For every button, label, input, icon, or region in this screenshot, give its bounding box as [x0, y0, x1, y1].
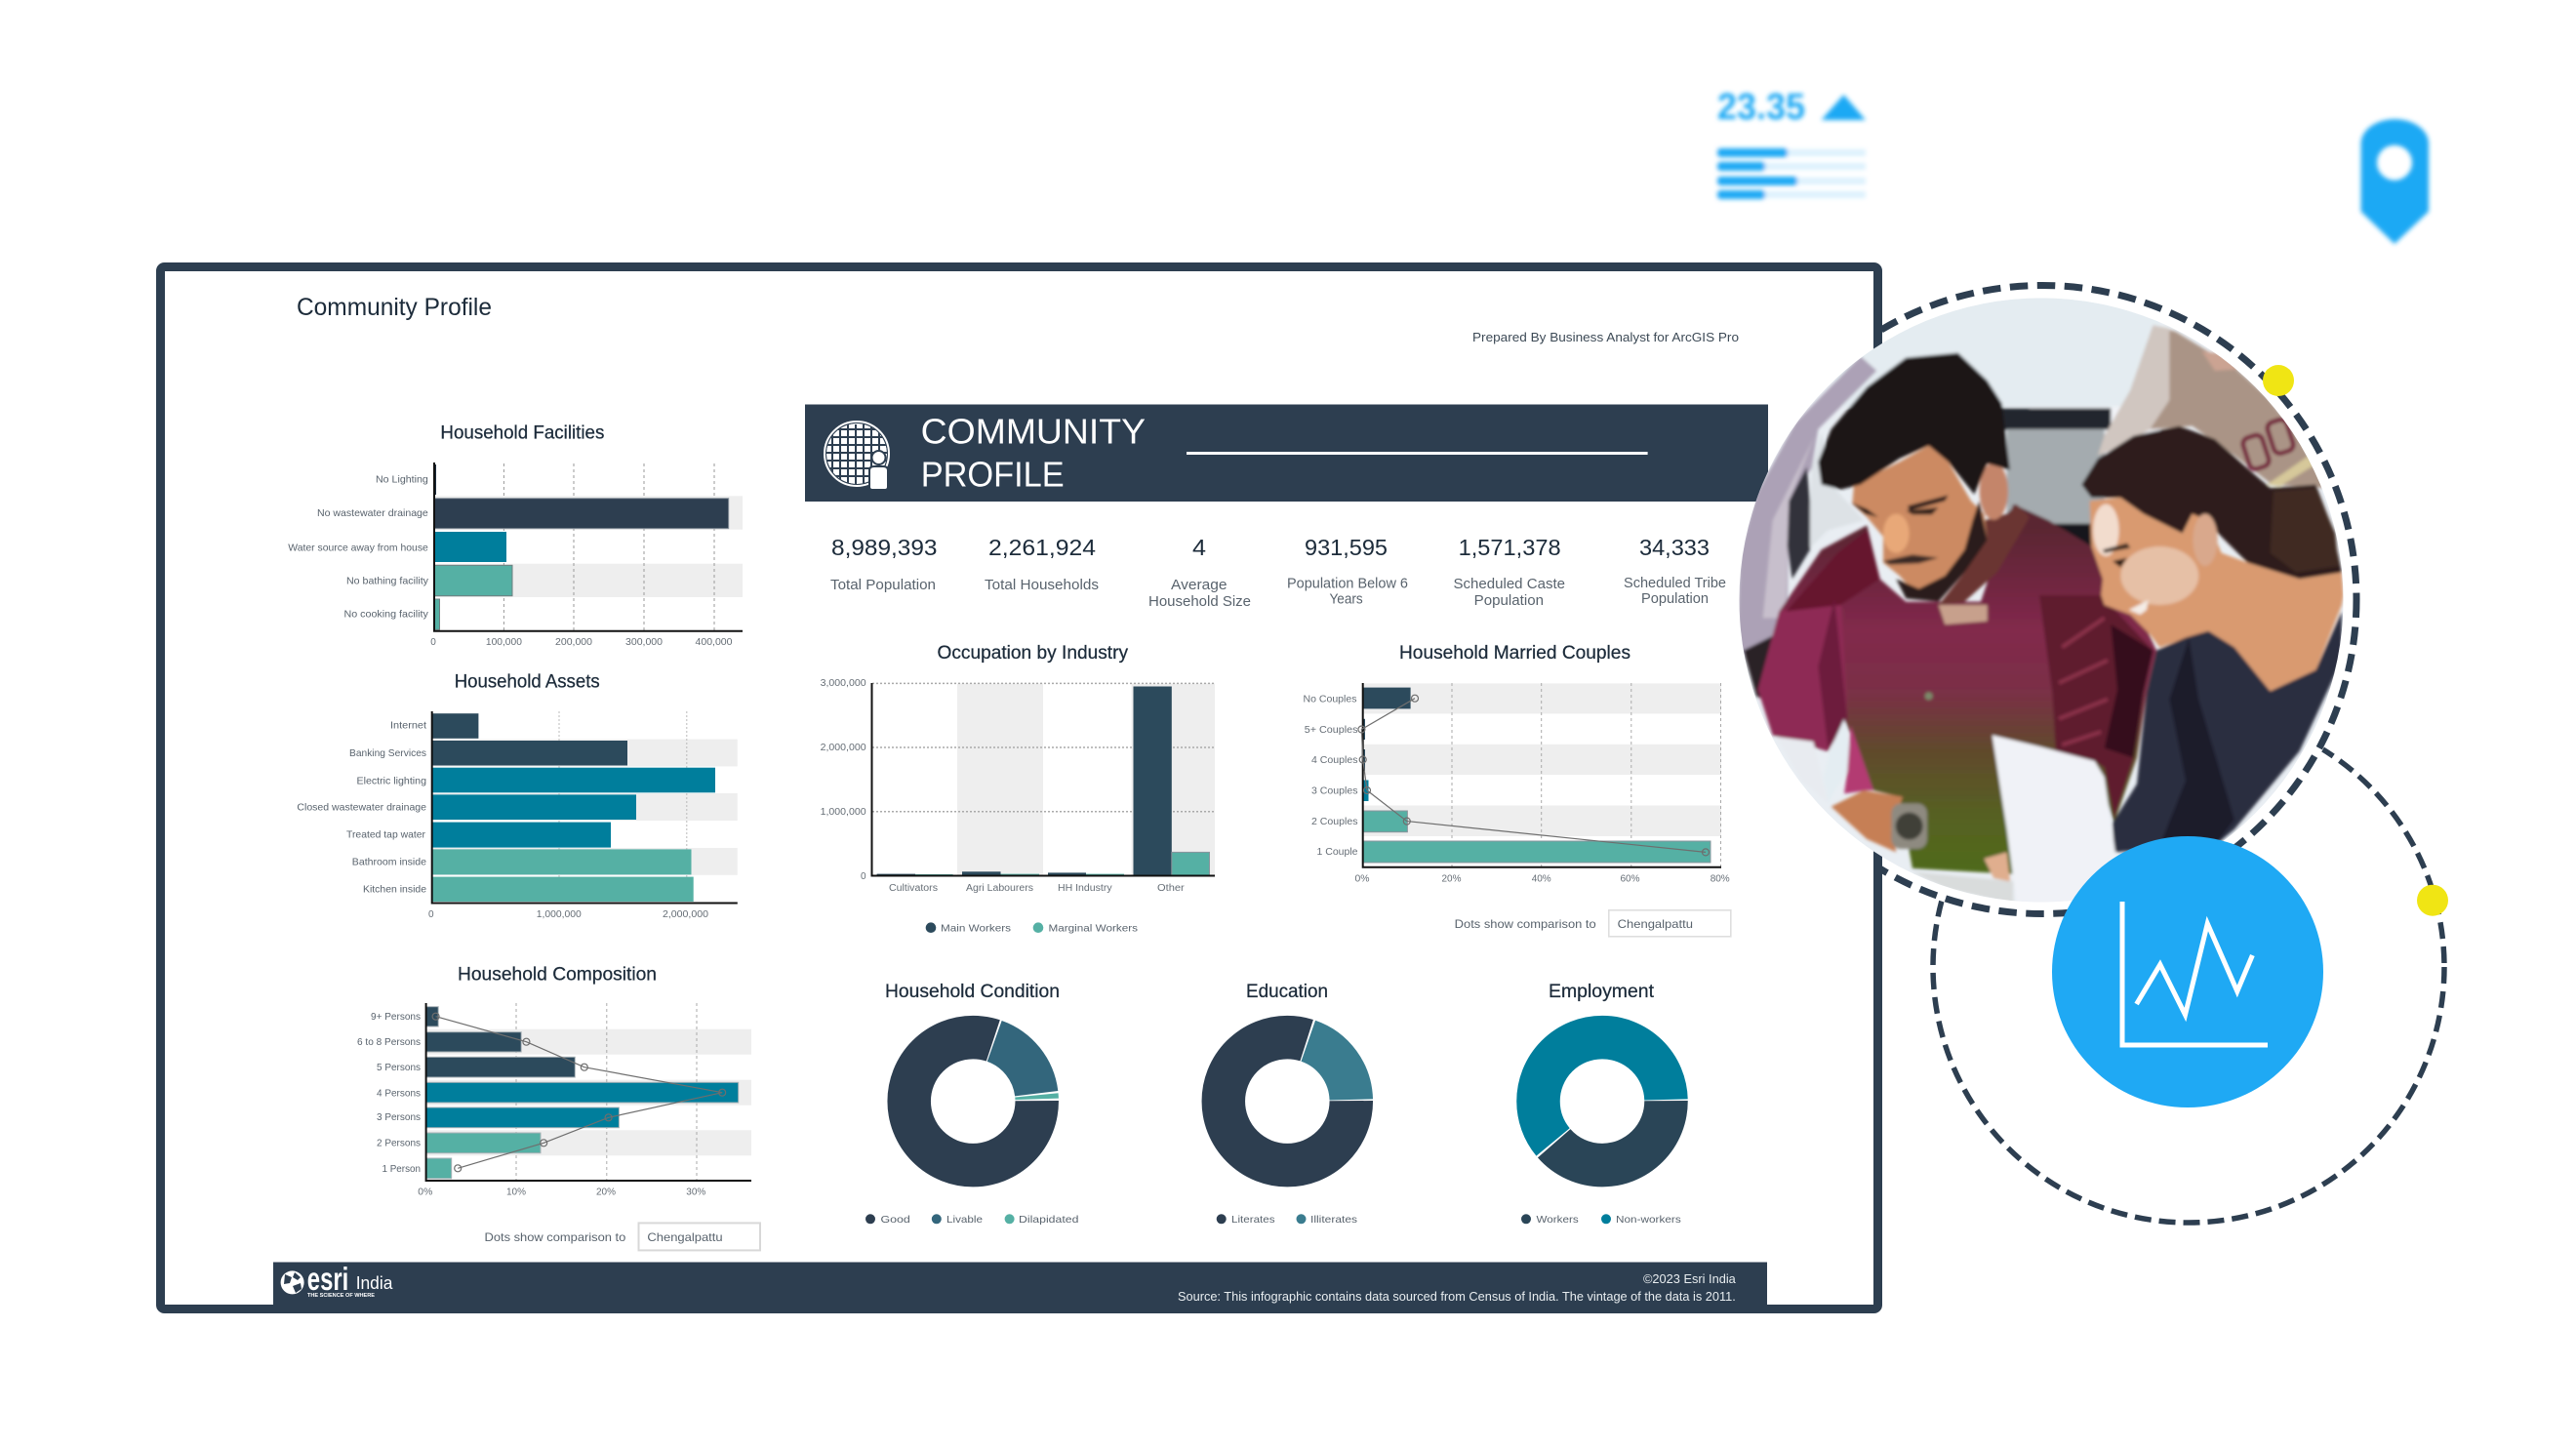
panel: household assets chart: 1,000,000 [537, 909, 582, 920]
woman's hair [2081, 426, 2342, 579]
panel: household married couples chart: 4 Couples [1311, 755, 1358, 766]
panel: household assets chart: Bathroom inside [352, 857, 426, 868]
legend [1217, 1214, 1357, 1226]
man's shirt [1758, 504, 2156, 875]
decorative blurred stat widget [1717, 87, 1866, 199]
yellow marker lower [2417, 885, 2448, 916]
panel: household facilities chart: No wastewater drainage [317, 507, 428, 519]
panel: household married couples chart: 2 Couples [1311, 817, 1358, 827]
panel: household composition chart: 0% [418, 1187, 432, 1198]
panel: household composition chart: 10% [506, 1187, 526, 1198]
panel: education donut [1217, 982, 1357, 1226]
panel: household married couples chart: No Couples [1304, 695, 1356, 704]
stat: scheduled tribe [1624, 535, 1726, 607]
panel: household facilities chart: 100,000 [486, 637, 522, 648]
panel: household facilities chart: Water source away from house [288, 542, 428, 553]
panel: household married couples chart: 60% [1620, 874, 1640, 884]
legend: Main Workers [941, 923, 1011, 935]
panel: household assets chart: 0 [428, 909, 434, 920]
panel: occupation by industry chart: Agri Labourers [966, 883, 1033, 894]
panel: household married couples chart: 5+ Couples [1305, 725, 1358, 736]
legend: Illiterates [1310, 1214, 1357, 1226]
decorative blurred stat widget: 23.35 [1717, 87, 1805, 128]
panel: household facilities chart: 300,000 [625, 637, 663, 648]
stat: average household size [1148, 535, 1251, 610]
dashed circle: lower [1933, 711, 2444, 1223]
panel: household assets chart [297, 671, 738, 920]
woman's shirt [2113, 612, 2342, 852]
heading: Household Married Couples [1399, 643, 1630, 664]
esri india logo: THE SCIENCE OF WHERE [307, 1293, 376, 1299]
panel: occupation by industry chart: 2,000,000 [821, 743, 866, 753]
panel: household composition chart: 4 Persons [377, 1087, 421, 1099]
stat: scheduled caste: 1,571,378 [1459, 535, 1561, 560]
heading: Education [1246, 982, 1328, 1002]
stat: scheduled caste: Population [1474, 592, 1544, 609]
panel: occupation by industry chart: 3,000,000 [821, 678, 866, 689]
heading: Household Condition [885, 982, 1060, 1002]
stat: total households: Total Households [985, 577, 1099, 593]
panel: household facilities chart: 400,000 [695, 637, 733, 648]
panel: occupation by industry chart: HH Industry [1058, 883, 1112, 894]
background person, right [2098, 325, 2325, 488]
stat: total population: 8,989,393 [831, 535, 937, 560]
stat: population below 6: Years [1329, 591, 1363, 607]
panel: household facilities chart: No cooking facility [343, 609, 429, 621]
panel: household facilities chart: No Lighting [376, 474, 428, 486]
header banner [805, 404, 1768, 502]
panel: household composition chart: 5 Persons [377, 1062, 421, 1073]
banner title [921, 412, 1146, 495]
heading: Household Assets [455, 671, 600, 693]
panel: household assets chart: Closed wastewater drainage [297, 802, 426, 814]
man's head [1939, 504, 2030, 605]
panel: household facilities chart: No bathing facility [346, 576, 429, 587]
copyright: ©2023 Esri India [1643, 1271, 1737, 1286]
dashed circle: upper [1728, 285, 2356, 913]
left laptop, cuff, forearm [1774, 734, 1819, 751]
esri india logo: esri [307, 1261, 348, 1297]
comparison dots line [1358, 695, 1710, 856]
stat: scheduled tribe: Scheduled Tribe [1624, 575, 1726, 591]
stat: scheduled tribe: 34,333 [1639, 535, 1710, 560]
stat: population below 6 [1287, 535, 1408, 607]
legend: Literates [1231, 1214, 1274, 1226]
panel: household composition chart: 30% [686, 1187, 705, 1198]
heading: Household Facilities [440, 423, 604, 443]
legend: Workers [1536, 1214, 1579, 1226]
esri india logo [281, 1261, 393, 1299]
heading: Household Composition [458, 964, 657, 986]
panel: household married couples chart: 80% [1711, 874, 1730, 884]
footer bar [273, 1261, 1767, 1313]
panel: occupation by industry chart: Other [1157, 883, 1185, 894]
stat: scheduled caste: Scheduled Caste [1454, 576, 1565, 592]
panel: household facilities chart: 200,000 [555, 637, 592, 648]
comparison dots line [432, 1013, 726, 1172]
source note: Source: This infographic contains data sourced from Census of India. The vintage of the data is 2011. [1178, 1289, 1736, 1304]
legend: Livable [946, 1214, 983, 1226]
panel: household composition chart: 6 to 8 Persons [357, 1036, 421, 1048]
icon: globe and person [825, 422, 889, 490]
panel: household married couples chart: 0% [1354, 874, 1370, 884]
comparison note: Dots show comparison to [1455, 917, 1596, 931]
legend [865, 1214, 1079, 1226]
panel: household assets chart: Banking Services [349, 747, 426, 759]
panel: household composition chart: 2 Persons [377, 1138, 421, 1149]
panel: household composition chart [357, 964, 760, 1250]
monitor [2002, 408, 2111, 429]
panel: occupation by industry chart: 1,000,000 [821, 807, 866, 818]
icon: location pin [2361, 119, 2429, 244]
stat: average household size: Household Size [1148, 593, 1251, 610]
esri india logo: India [356, 1273, 393, 1293]
panel: household married couples chart: 40% [1532, 874, 1551, 884]
panel: household married couples chart: Chengalpattu [1618, 917, 1693, 931]
stat: scheduled caste [1454, 535, 1565, 609]
heading: Employment [1549, 982, 1655, 1002]
panel: household married couples chart: 1 Couple [1317, 847, 1358, 858]
stat: total households: 2,261,924 [988, 535, 1096, 560]
stat: average household size: Average [1171, 577, 1228, 593]
white backing disc [1724, 281, 2360, 917]
icon: line chart [2122, 902, 2268, 1045]
panel: household assets chart: Electric lighting [357, 775, 426, 786]
panel: occupation by industry chart: Cultivators [889, 883, 938, 894]
panel: household composition chart: 9+ Persons [371, 1011, 421, 1023]
legend: Dilapidated [1019, 1214, 1079, 1226]
panel: household married couples chart: 3 Couples [1311, 786, 1358, 796]
stat: population below 6: Population Below 6 [1287, 576, 1408, 591]
comparison box [1609, 910, 1731, 937]
stat: total population [830, 535, 937, 593]
legend [926, 922, 1138, 935]
prepared by note: Prepared By Business Analyst for ArcGIS Pro [1472, 330, 1739, 344]
panel: occupation by industry chart [821, 643, 1215, 935]
panel: household condition donut [865, 982, 1079, 1226]
legend: Marginal Workers [1048, 923, 1138, 935]
comparison note: Dots show comparison to [484, 1230, 626, 1244]
panel: household assets chart: Treated tap water [346, 829, 425, 841]
comparison box [638, 1223, 760, 1250]
panel: household facilities chart: 0 [430, 637, 436, 648]
panel: household married couples chart: 20% [1442, 874, 1462, 884]
stat: population below 6: 931,595 [1305, 535, 1388, 560]
panel: occupation by industry chart: 0 [861, 871, 866, 882]
center laptop [1992, 735, 2115, 905]
panel: household married couples chart [1304, 643, 1731, 937]
stat: scheduled tribe: Population [1641, 590, 1709, 607]
infographic canvas [156, 90, 2448, 1313]
panel: household assets chart: 2,000,000 [663, 909, 708, 920]
panel: household composition chart: 3 Persons [377, 1111, 421, 1123]
stat: average household size: 4 [1192, 535, 1206, 560]
panel: household composition chart: 1 Person [382, 1163, 421, 1175]
page title: Community Profile [297, 294, 492, 321]
legend [1521, 1214, 1681, 1226]
panel: employment donut [1521, 982, 1681, 1226]
legend: Good [880, 1214, 910, 1226]
banner title: PROFILE [921, 455, 1065, 495]
heading: Occupation by Industry [937, 643, 1128, 664]
photo: two colleagues at a laptop [1737, 293, 2352, 907]
panel: household composition chart: 20% [596, 1187, 616, 1198]
stat: total population: Total Population [830, 577, 936, 593]
panel: household facilities chart [288, 423, 743, 648]
key statistics [830, 535, 1726, 610]
panel: community profile frame [160, 267, 1877, 1313]
yellow marker upper [2263, 365, 2294, 396]
blue icon circle [2052, 836, 2323, 1107]
woman's face [2090, 498, 2344, 691]
background person, left [1737, 356, 1876, 657]
legend: Non-workers [1616, 1214, 1681, 1226]
panel: household assets chart: Kitchen inside [363, 884, 426, 896]
banner title: COMMUNITY [921, 412, 1146, 452]
stat: total households [985, 535, 1099, 593]
panel: household assets chart: Internet [390, 720, 426, 732]
panel: household composition chart: Chengalpattu [647, 1230, 723, 1244]
